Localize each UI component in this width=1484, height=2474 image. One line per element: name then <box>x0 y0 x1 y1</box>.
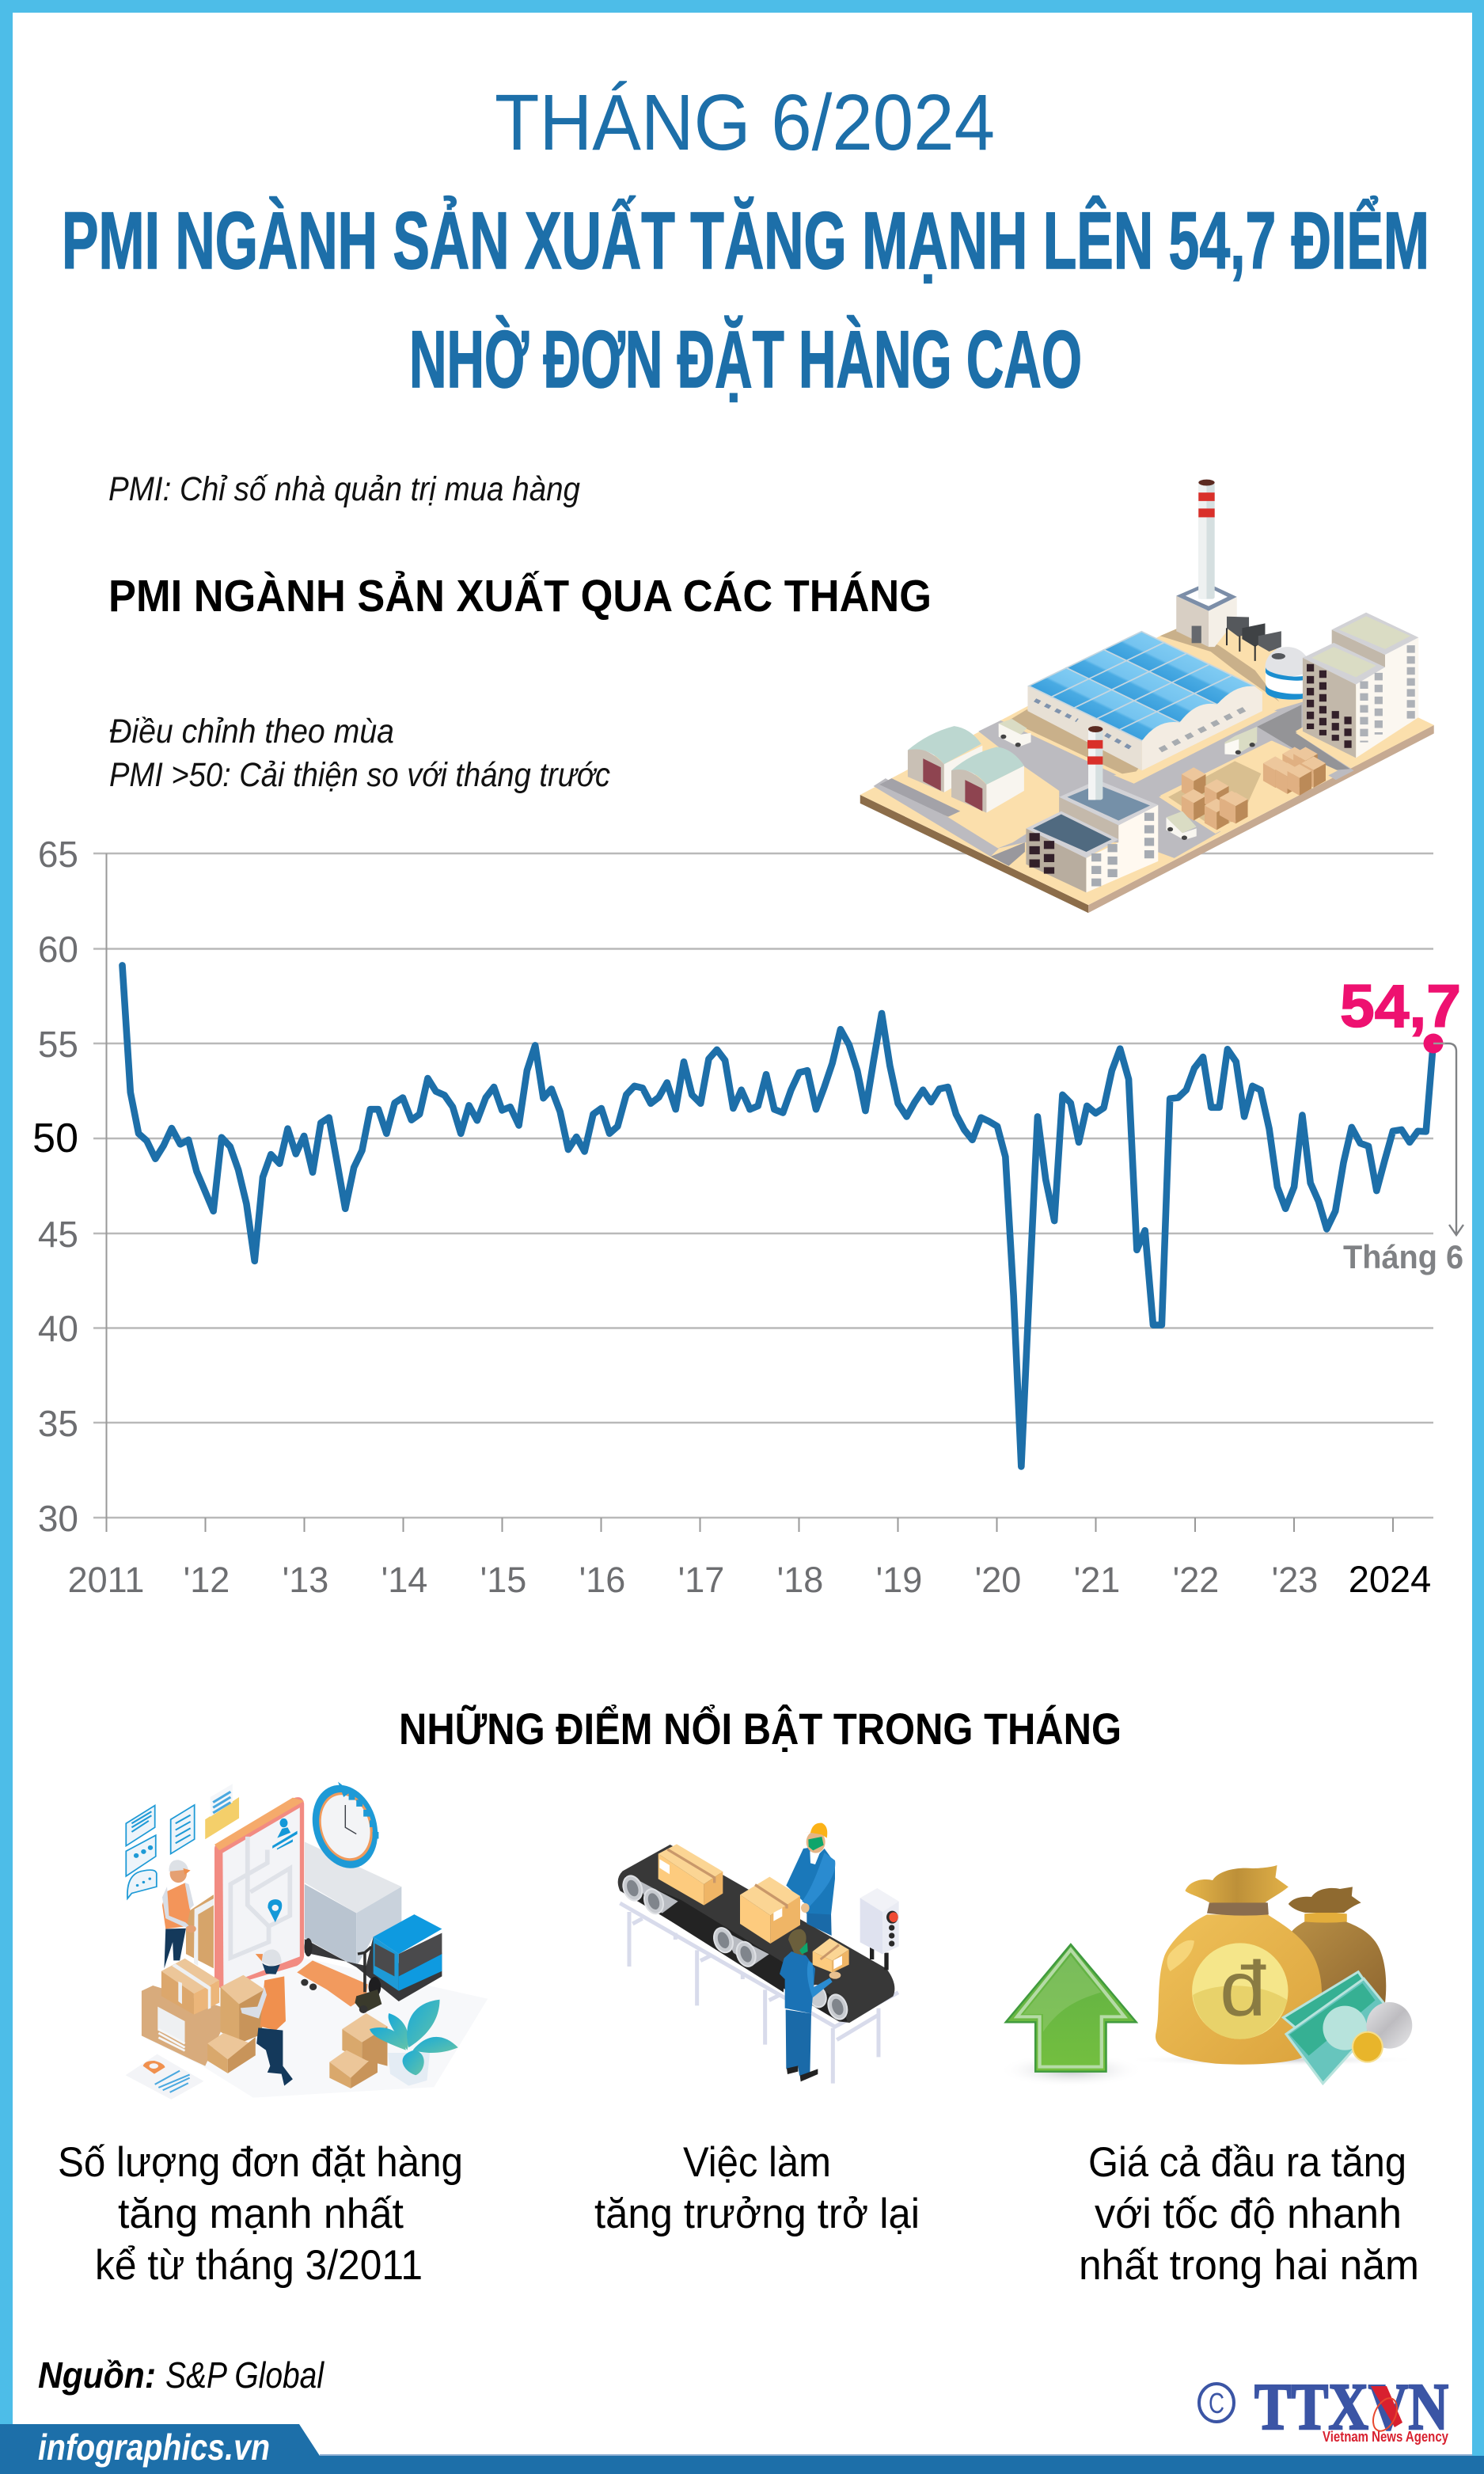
y axis labels: 45 <box>38 1214 78 1255</box>
y axis labels: 40 <box>38 1308 78 1349</box>
logo: TTXVN: Vietnam News Agency <box>1323 2429 1448 2445</box>
note: PMI definition: PMI: Chỉ số nhà quản trị mua hàng <box>108 470 580 508</box>
x axis labels: '12 <box>184 1560 230 1600</box>
chart notes: PMI >50: Cải thiện so với tháng trước <box>109 756 610 794</box>
factory: cooling units <box>1227 617 1281 661</box>
clock <box>303 1779 387 1875</box>
x axis labels: '19 <box>876 1560 922 1600</box>
belt <box>618 1845 894 2023</box>
factory: main hall with blue roof <box>1027 632 1262 770</box>
x axis labels: '14 <box>381 1560 427 1600</box>
y axis labels: 30 <box>38 1498 78 1539</box>
PMI line <box>122 965 1433 1466</box>
caption: orders: tăng mạnh nhất <box>118 2191 404 2237</box>
callout: latest value: 54,7 <box>1340 973 1461 1040</box>
factory: storage sheds <box>908 726 1024 813</box>
y axis labels: 35 <box>38 1403 78 1444</box>
source: S&P Global <box>165 2354 325 2396</box>
control box <box>860 1888 899 1970</box>
caption: output prices: nhất trong hai năm <box>1079 2242 1419 2289</box>
envelope <box>205 1784 239 1839</box>
factory: rear chimney <box>1176 480 1237 647</box>
callout: latest value: Tháng 6 <box>1343 1238 1463 1275</box>
x axis labels: '22 <box>1173 1560 1219 1600</box>
worker left <box>162 1860 196 1968</box>
caption: orders: Số lượng đơn đặt hàng <box>58 2139 463 2186</box>
title line: headline second row: NHỜ ĐƠN ĐẶT HÀNG CAO <box>409 314 1082 405</box>
icon: conveyor belt with workers <box>618 1823 899 2084</box>
icon: isometric factory <box>860 480 1434 913</box>
factory: box stacks <box>1182 747 1326 830</box>
caption: output prices: Giá cả đầu ra tăng <box>1088 2139 1406 2186</box>
y axis labels: 55 <box>38 1024 78 1065</box>
x axis labels: '21 <box>1074 1560 1120 1600</box>
chart notes: Điều chỉnh theo mùa <box>109 713 394 751</box>
phone with map <box>214 1797 304 1988</box>
x axis labels: '17 <box>678 1560 724 1600</box>
chart notes <box>109 713 610 794</box>
chart heading: PMI NGÀNH SẢN XUẤT QUA CÁC THÁNG <box>108 570 932 621</box>
truck <box>305 1842 442 2001</box>
worker right <box>241 1949 293 2086</box>
caption: output prices <box>1079 2139 1419 2289</box>
source: Nguồn: <box>38 2354 156 2396</box>
y axis labels: 65 <box>38 834 78 875</box>
back bag <box>1286 1887 1386 2011</box>
factory: office tower <box>1303 613 1418 758</box>
conveyor table legs <box>620 1903 898 2084</box>
front bag: đ <box>1220 1944 1266 2032</box>
x axis labels: '16 <box>579 1560 625 1600</box>
caption: orders <box>58 2139 463 2289</box>
section heading: highlights: NHỮNG ĐIỂM NỔI BẬT TRONG THÁNG <box>399 1704 1122 1754</box>
boxes on belt <box>659 1844 849 1973</box>
coins <box>1352 2002 1412 2063</box>
y axis labels: 60 <box>38 929 78 970</box>
icon: logistics and orders <box>126 1779 488 2100</box>
footer site name: infographics.vn <box>38 2426 270 2468</box>
boxes and plant <box>329 2000 458 2088</box>
footer band <box>0 2424 1484 2474</box>
factory: front building and chimney <box>1026 726 1158 892</box>
boxes behind worker <box>186 1894 214 1968</box>
rollers <box>620 1873 850 2022</box>
title line: month: THÁNG 6/2024 <box>495 78 995 167</box>
icon: rising prices with money bags <box>999 1865 1419 2088</box>
caption: employment: tăng trưởng trở lại <box>594 2191 920 2237</box>
x axis labels: 2024 <box>1349 1558 1431 1600</box>
green arrow <box>1006 1944 1137 2072</box>
caption: output prices: với tốc độ nhanh <box>1095 2191 1402 2237</box>
pallet jack <box>297 1947 381 2013</box>
worker at back <box>786 1823 835 1936</box>
x axis labels: '23 <box>1272 1560 1318 1600</box>
logo: TTXVN <box>1199 2370 1448 2445</box>
line chart: PMI by month <box>32 834 1463 1600</box>
caption: orders: kể từ tháng 3/2011 <box>95 2242 423 2289</box>
factory: delivery trucks <box>999 719 1257 840</box>
stacked crate and boxes <box>142 1959 264 2073</box>
location document <box>126 2054 203 2100</box>
caption: employment: Việc làm <box>683 2139 831 2186</box>
logo: TTXVN: TTXVN <box>1254 2370 1448 2444</box>
y axis labels <box>32 834 78 1539</box>
source <box>38 2354 325 2396</box>
x axis labels: '15 <box>480 1560 526 1600</box>
front bag <box>1156 1865 1322 2065</box>
x axis labels: 2011 <box>68 1560 144 1600</box>
logo: TTXVN: C <box>1209 2387 1224 2419</box>
x axis labels: '18 <box>777 1560 823 1600</box>
x axis labels: '20 <box>975 1560 1021 1600</box>
y axis labels: 50 <box>32 1115 78 1161</box>
order documents <box>126 1805 195 1898</box>
factory: water tank <box>1265 647 1310 700</box>
title block <box>62 78 1429 405</box>
banknotes <box>1283 1972 1383 2084</box>
callout: latest value <box>1340 973 1463 1275</box>
caption: employment <box>594 2139 920 2237</box>
x axis labels: '13 <box>283 1560 328 1600</box>
worker at front <box>780 1929 841 2081</box>
x axis labels <box>68 1558 1431 1600</box>
